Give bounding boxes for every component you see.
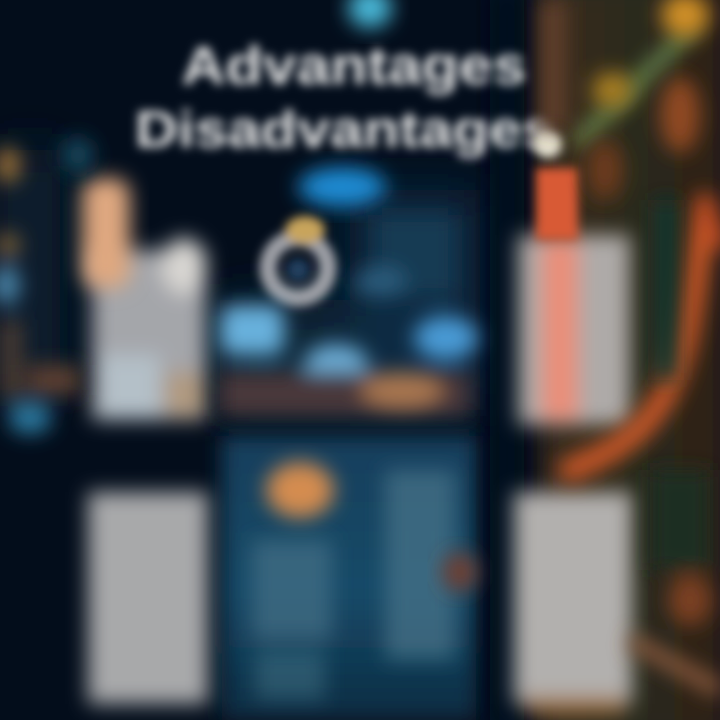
background glows xyxy=(0,150,480,410)
icon: white glow at title end xyxy=(534,130,562,158)
panel: left upper white card xyxy=(92,238,206,420)
title: Disadvantages xyxy=(135,101,555,159)
accent: small red-brown dot xyxy=(442,552,478,592)
wires: orange cable xyxy=(570,30,718,470)
lower centre text columns xyxy=(252,470,455,700)
panel: right lower grey card xyxy=(514,492,632,713)
panel: lower left white card xyxy=(88,492,208,704)
icon: peach bar xyxy=(82,178,130,288)
icon: top cyan glow xyxy=(348,0,392,28)
chart: centre blocks xyxy=(220,215,478,416)
left edge accents xyxy=(0,137,94,434)
title: Advantages xyxy=(182,36,526,96)
icon: orange-red top bar xyxy=(536,168,578,240)
icon: orange glow in lower centre xyxy=(266,462,334,518)
title xyxy=(135,36,555,159)
icon: blue oval xyxy=(298,167,386,207)
panel: lower centre blue xyxy=(222,436,476,720)
dark divider between centre and right xyxy=(490,0,524,720)
wires: accents xyxy=(540,0,720,690)
panel: right wires backdrop xyxy=(540,0,720,720)
panel: right upper grey card xyxy=(518,235,630,425)
icon: gear circle xyxy=(268,216,328,298)
